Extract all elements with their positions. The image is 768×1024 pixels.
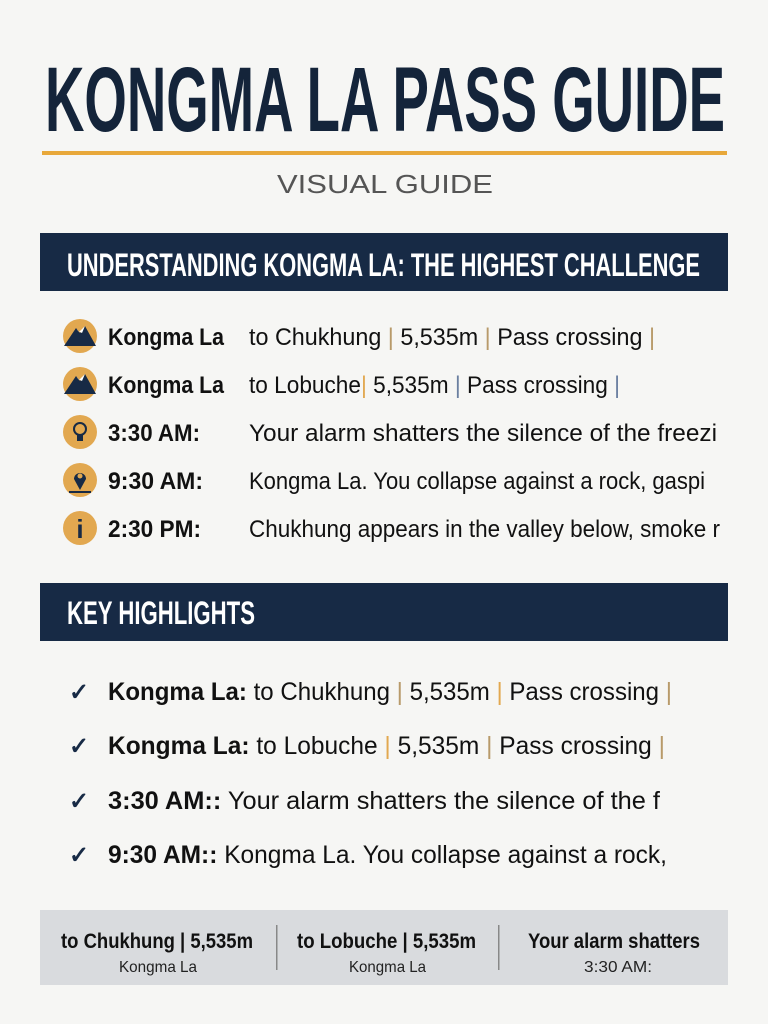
- stat 3: [528, 930, 700, 976]
- banner: understanding: [40, 233, 728, 291]
- row 4: Kongma La. You collapse against a rock, gaspi: [249, 468, 705, 495]
- row 3: 3:30 AM:: [108, 420, 200, 447]
- row 3: Your alarm shatters the silence of the freezi: [249, 420, 717, 447]
- stat 3: 3:30 AM:: [584, 959, 652, 976]
- stat 1: [61, 930, 253, 976]
- row 5: i: [76, 514, 84, 544]
- highlight 4: ✓: [69, 842, 89, 869]
- stat 3: Your alarm shatters: [528, 930, 700, 953]
- row 4: [63, 463, 705, 497]
- row 1: [63, 319, 655, 353]
- list: highlights: [69, 678, 672, 869]
- stat 2: [297, 930, 476, 976]
- row 3: [63, 415, 717, 449]
- highlight 1: Kongma La: to Chukhung | 5,535m | Pass crossing |: [108, 678, 672, 706]
- stat 1: Kongma La: [119, 959, 197, 976]
- highlight 4: 9:30 AM:: Kongma La. You collapse against a rock,: [108, 841, 667, 869]
- row 1: Kongma La: [108, 324, 225, 351]
- stat 2: to Lobuche | 5,535m: [297, 930, 476, 953]
- highlight 1: ✓: [69, 679, 89, 706]
- highlight 3: ✓: [69, 788, 89, 815]
- highlight 2: ✓: [69, 733, 89, 760]
- banner: key highlights: KEY HIGHLIGHTS: [67, 595, 255, 631]
- row 4: 9:30 AM:: [108, 468, 203, 495]
- row 2: to Lobuche| 5,535m | Pass crossing |: [249, 372, 620, 399]
- subtitle: VISUAL GUIDE: [277, 169, 493, 199]
- highlight 2: Kongma La: to Lobuche | 5,535m | Pass crossing |: [108, 732, 665, 760]
- stat 2: Kongma La: [349, 959, 426, 976]
- stat 1: to Chukhung | 5,535m: [61, 930, 253, 953]
- row 5: 2:30 PM:: [108, 516, 201, 543]
- highlight 3: 3:30 AM:: Your alarm shatters the silence of the f: [108, 787, 660, 815]
- row 5: [63, 511, 720, 545]
- row 2: [63, 367, 620, 401]
- row 2: Kongma La: [108, 372, 225, 399]
- banner: key highlights: [40, 583, 728, 641]
- row 5: Chukhung appears in the valley below, smoke r: [249, 516, 720, 543]
- list: understanding rows: [63, 319, 720, 545]
- row 1: to Chukhung | 5,535m | Pass crossing |: [249, 324, 655, 351]
- stats bar: [40, 910, 728, 985]
